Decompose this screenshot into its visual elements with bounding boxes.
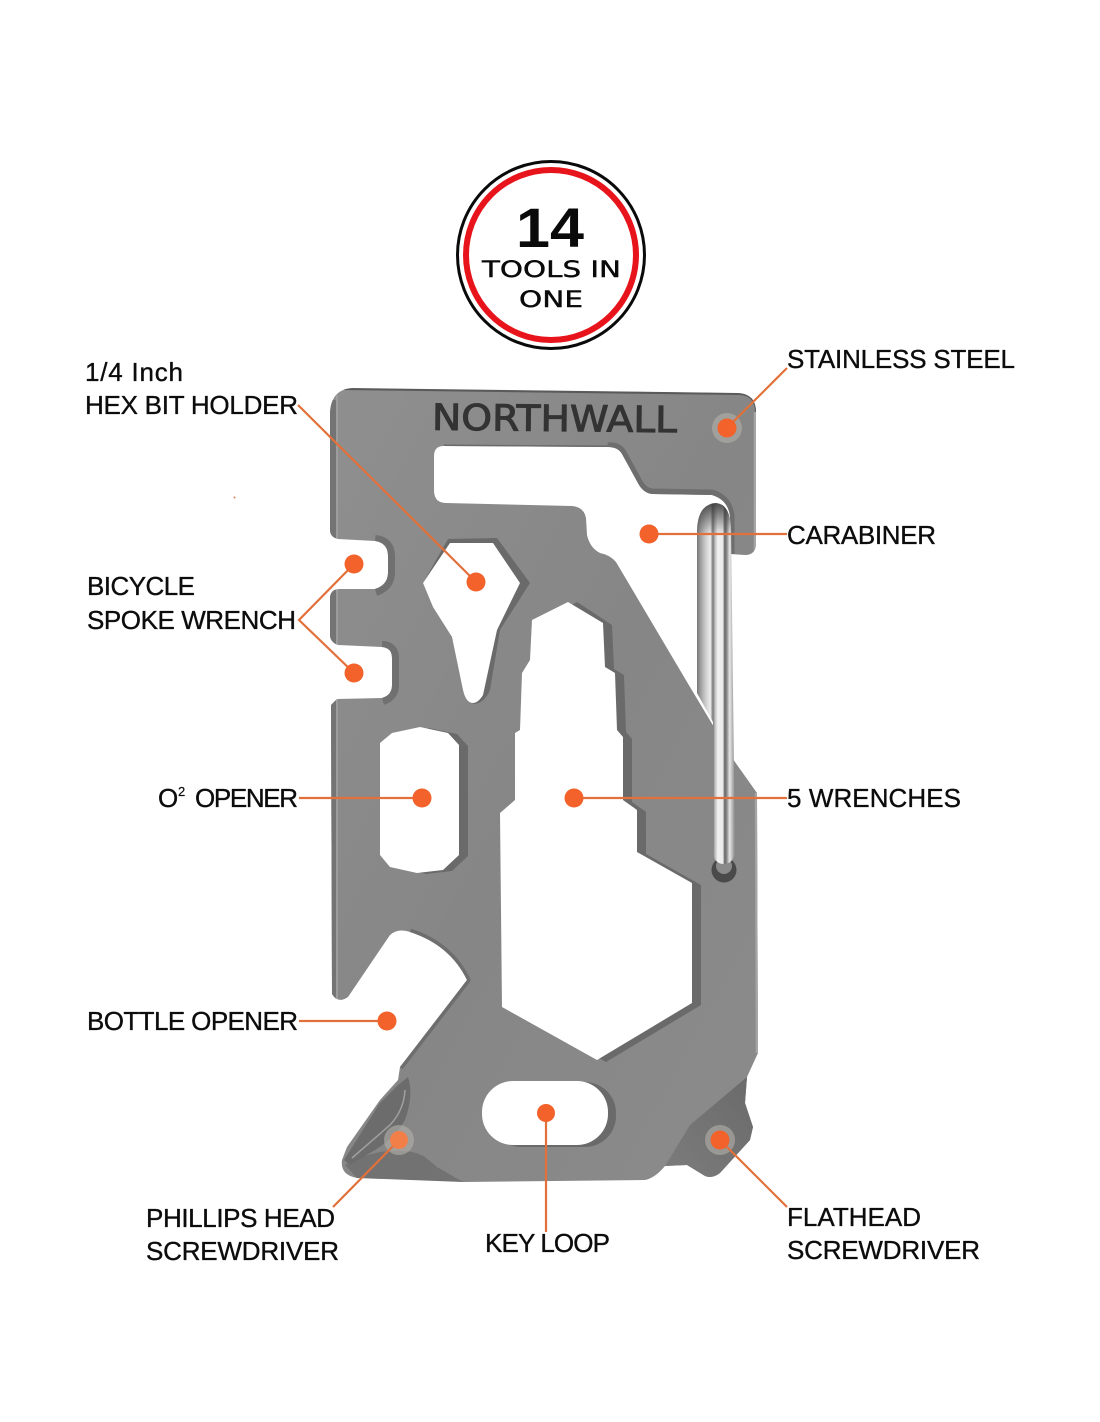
O2 opener cutout bbox=[380, 727, 459, 873]
callout: O2 opener bbox=[158, 783, 432, 813]
callout: bottle opener: BOTTLE OPENER bbox=[87, 1006, 298, 1036]
callout: flathead screwdriver: FLATHEAD bbox=[787, 1202, 921, 1232]
callout: 5 wrenches: 5 WRENCHES bbox=[787, 783, 961, 813]
callout: O2 opener: O bbox=[158, 783, 178, 813]
callout: hex bit holder: HEX BIT HOLDER bbox=[85, 390, 298, 420]
callout: stainless steel bbox=[712, 344, 1015, 443]
badge: 14 tools in one: TOOLS IN bbox=[481, 258, 621, 283]
flathead screwdriver tip bbox=[665, 1077, 753, 1177]
callout: 5 wrenches bbox=[564, 783, 961, 813]
callout: bicycle spoke wrench: BICYCLE bbox=[87, 571, 195, 601]
callout: carabiner: CARABINER bbox=[787, 520, 936, 550]
callout: carabiner bbox=[640, 520, 936, 550]
badge: 14 tools in one bbox=[458, 162, 644, 348]
carabiner ring bbox=[697, 503, 735, 864]
callout: phillips head screwdriver: SCREWDRIVER bbox=[146, 1236, 339, 1266]
callout: hex bit holder: 1/4 Inch bbox=[85, 357, 183, 387]
key loop cutout bbox=[482, 1081, 608, 1145]
callout: flathead screwdriver bbox=[705, 1125, 980, 1265]
wrench cutout bbox=[500, 602, 692, 1060]
hex bit holder cutout bbox=[423, 543, 520, 703]
callout: O2 opener: OPENER bbox=[195, 783, 298, 813]
callout: key loop bbox=[485, 1104, 610, 1258]
tool: multi-tool body bbox=[330, 388, 758, 1182]
phillips screwdriver tip bbox=[344, 1077, 463, 1182]
callout: O2 opener: 2 bbox=[178, 784, 185, 799]
callout: key loop: KEY LOOP bbox=[485, 1228, 610, 1258]
callout: bicycle spoke wrench: SPOKE WRENCH bbox=[87, 605, 296, 635]
callout: hex bit holder bbox=[85, 357, 486, 592]
callout: phillips head screwdriver bbox=[146, 1125, 414, 1266]
callout: flathead screwdriver: SCREWDRIVER bbox=[787, 1235, 980, 1265]
callout: bottle opener bbox=[87, 1006, 396, 1036]
callout: bicycle spoke wrench bbox=[87, 554, 364, 682]
callout: stainless steel: STAINLESS STEEL bbox=[787, 344, 1015, 374]
hole bevels bbox=[389, 538, 701, 1147]
badge: 14 tools in one: 14 bbox=[516, 196, 584, 259]
badge: 14 tools in one: ONE bbox=[519, 288, 583, 313]
brand: NORTHWALL: NORTHWALL bbox=[432, 398, 677, 441]
carabiner groove bbox=[712, 858, 736, 882]
callout: phillips head screwdriver: PHILLIPS HEAD bbox=[146, 1203, 335, 1233]
